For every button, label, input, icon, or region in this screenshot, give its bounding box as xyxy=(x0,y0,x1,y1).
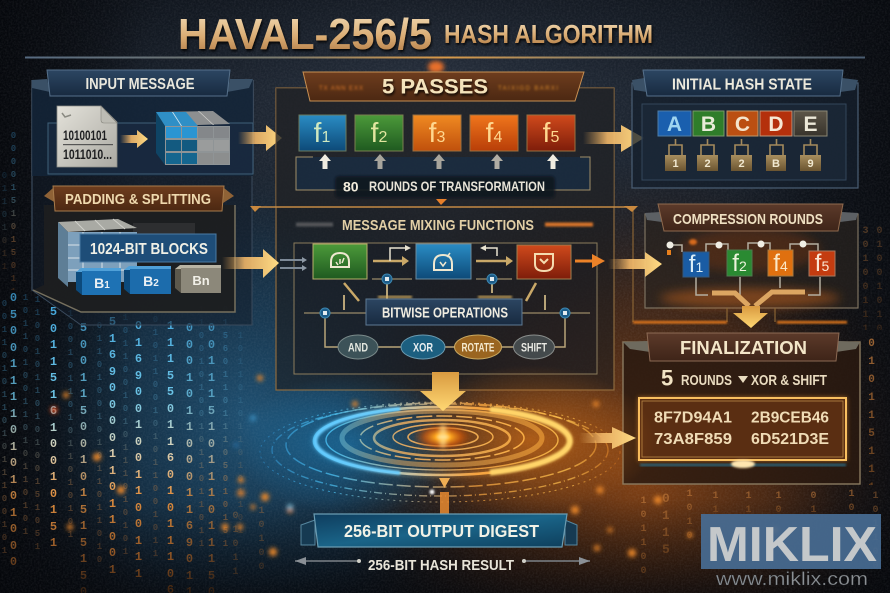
binary rain: left columns: 10100 xyxy=(258,506,264,573)
function f1: f xyxy=(314,117,321,148)
logo: MIKLIX xyxy=(701,514,881,589)
label: 80 rounds of transformation: 80 xyxy=(343,178,359,194)
hash value box: 2B9CEB46 xyxy=(751,410,829,426)
hash value box: 73A8F859 xyxy=(654,431,732,448)
panel: input message xyxy=(32,70,253,325)
heading: initial hash state: INITIAL HASH STATE xyxy=(672,76,812,94)
text: 5 rounds xor and shift xyxy=(661,366,827,390)
label: 80 rounds of transformation: ROUNDS OF TRANSFORMATION xyxy=(369,178,545,194)
pill: SHIFT: SHIFT xyxy=(521,340,547,354)
banner: 256-bit output digest xyxy=(301,514,577,547)
binary rain: left columns: 501151610010151 xyxy=(50,305,57,550)
binary rain: left columns: 11155011601011106 xyxy=(167,319,174,593)
register B: B xyxy=(701,113,716,136)
connector nodes xyxy=(320,274,570,318)
text: 5 rounds xor and shift: 5 xyxy=(661,366,673,390)
icon: data block stack xyxy=(58,219,195,287)
bracket: transformation frame xyxy=(296,157,590,190)
glowing rails xyxy=(633,308,847,324)
binary rain: left columns: 11001011010100151051 xyxy=(35,295,40,552)
pass functions f1 to f5 xyxy=(299,115,575,151)
binary rain: left columns: 10 xyxy=(848,489,854,514)
binary rain: left columns: 1011010110101101 xyxy=(238,331,243,536)
lock 5: 9 xyxy=(807,158,814,170)
binary rain: left columns: 00110101101011100101 xyxy=(2,299,7,556)
panel: initial hash state xyxy=(632,70,858,188)
label: 256-bit hash result xyxy=(295,557,590,574)
panel: finalization xyxy=(623,333,860,484)
binary rain: left columns: 0169001001100111 xyxy=(135,319,142,580)
icon: binary document: 10100101 xyxy=(63,127,107,143)
lock 3: 2 xyxy=(738,158,745,170)
text: 5 rounds xor and shift: ROUNDS xyxy=(681,373,732,389)
compression f1: f1 xyxy=(689,251,703,278)
function f2: f2 xyxy=(371,117,387,148)
register A: A xyxy=(667,113,682,136)
panel: compression rounds xyxy=(624,204,858,322)
pill: ROTATE xyxy=(454,335,502,359)
logo: MIKLIX: MIKLIX xyxy=(707,518,877,572)
function f5 xyxy=(527,115,575,151)
binary rain: left columns: 50011500101515150 xyxy=(80,321,87,593)
register D: D xyxy=(768,113,784,136)
banner: 256-bit output digest: 256-BIT OUTPUT DIGEST xyxy=(344,521,539,541)
heading: padding and splitting xyxy=(53,186,224,211)
panel: mixing inner frame xyxy=(294,243,597,374)
function f2 xyxy=(355,115,403,151)
function f3 xyxy=(413,115,461,151)
heading: input message: INPUT MESSAGE xyxy=(86,76,194,93)
function f1 xyxy=(299,115,346,151)
register B xyxy=(693,111,724,136)
binary rain: left columns: 1010 xyxy=(686,489,692,542)
small down arrow xyxy=(436,199,447,205)
pill: SHIFT xyxy=(514,335,554,359)
compression functions xyxy=(683,250,835,278)
heading: 5 passes: TX ANN EXX xyxy=(319,86,363,92)
arrows: into mixing xyxy=(280,260,304,268)
arrow: compression to finalization xyxy=(733,306,768,328)
binary rain: left columns: 0156011011105010151 xyxy=(223,305,228,549)
arrow: mixing to compression xyxy=(575,254,605,268)
hash value box xyxy=(638,397,847,468)
hash locks xyxy=(665,155,821,171)
function f1: 1 xyxy=(321,129,330,146)
arrow: mixing to vortex xyxy=(420,372,466,411)
lock 1: 1 xyxy=(672,158,679,170)
bitwise operations box: BITWISE OPERATIONS xyxy=(382,306,508,322)
mixing block red xyxy=(517,245,571,279)
panel: padding and splitting xyxy=(33,186,235,312)
binary rain: left columns: 01101011 xyxy=(2,171,7,272)
binary rain: left columns: 01011 xyxy=(232,511,238,578)
compression f4 xyxy=(768,250,793,277)
function f4: f4 xyxy=(486,117,502,148)
round connectors xyxy=(672,243,820,295)
binary rain: left columns: 1100101001011011011 xyxy=(199,305,204,549)
label: 1024-bit blocks: 1024-BIT BLOCKS xyxy=(90,241,208,258)
title xyxy=(178,10,653,59)
lock 4 xyxy=(766,155,786,171)
binary rain: left columns: 0110100101011011010 xyxy=(97,321,102,565)
state registers A to E xyxy=(658,111,827,136)
binary rain: left columns: 1011010011010110101 xyxy=(23,293,28,537)
glowing particles xyxy=(50,375,778,557)
register D xyxy=(760,111,792,136)
lock 5 xyxy=(800,155,821,171)
vortex xyxy=(235,365,655,515)
arrow: vortex to finalization xyxy=(579,427,636,449)
pill: ROTATE: ROTATE xyxy=(462,340,494,354)
connector: vortex to digest xyxy=(439,478,450,514)
connectors xyxy=(304,248,590,347)
lock 2 xyxy=(697,155,718,171)
heading: input message xyxy=(47,70,230,96)
register A xyxy=(658,111,691,136)
heading: message mixing functions: MESSAGE MIXING FUNCTIONS xyxy=(342,217,534,234)
register C: C xyxy=(735,113,750,136)
hash value box: 6D521D3E xyxy=(751,431,829,448)
binary rain: left columns: 0101100101011001011 xyxy=(153,315,158,559)
logo: MIKLIX: www.miklix.com xyxy=(715,569,868,589)
pill: XOR: XOR xyxy=(413,340,433,354)
pill: XOR xyxy=(401,335,445,359)
icon: block matrix cube xyxy=(156,111,230,165)
mixing block blue xyxy=(416,244,471,279)
arrow: input to passes xyxy=(238,125,282,151)
title: HAVAL-256/5 xyxy=(178,10,432,59)
heading: 5 passes: 5 PASSES xyxy=(382,76,488,98)
up arrows xyxy=(319,154,559,169)
lock 3 xyxy=(731,155,752,171)
heading: 5 passes: TAIXIGD BARXI xyxy=(498,86,558,92)
compression f5: f5 xyxy=(815,250,829,277)
block B2 xyxy=(124,266,171,294)
arrow: padding to mixing xyxy=(222,249,279,278)
label: 80 rounds of transformation xyxy=(335,176,555,198)
text: 5 rounds xor and shift: XOR & SHIFT xyxy=(751,373,827,389)
lock 2: 2 xyxy=(704,158,711,170)
function f4 xyxy=(470,115,518,151)
binary rain: left columns: 1011001010111010101 xyxy=(123,313,128,557)
arrow: passes to initial state xyxy=(583,125,644,152)
heading: 5 passes xyxy=(303,72,584,101)
block B1 xyxy=(76,268,121,295)
function f5: f5 xyxy=(543,117,559,148)
heading: finalization xyxy=(647,333,839,361)
bitwise pills xyxy=(338,335,554,359)
hash value box: 8F7D94A1 xyxy=(654,410,732,426)
label: 1024-bit blocks xyxy=(80,234,216,262)
icon: binary document xyxy=(57,106,117,167)
binary rain: left columns: 5169000011011001 xyxy=(109,315,116,576)
pill: AND xyxy=(338,335,378,359)
register E xyxy=(794,111,827,136)
arrow: mixing into compression xyxy=(608,252,662,277)
binary rain: left columns: 100101101011010101 xyxy=(68,309,73,540)
heading: compression rounds xyxy=(658,204,843,231)
binary rain: left columns: 05001111010101000 xyxy=(10,291,17,569)
mixing block green xyxy=(313,244,367,279)
block Bn: Bn xyxy=(192,273,210,288)
compression f1 xyxy=(683,251,709,278)
bitwise operations box xyxy=(366,296,522,325)
block B2: B2 xyxy=(143,273,159,289)
function f3: f3 xyxy=(429,117,445,148)
heading: compression rounds: COMPRESSION ROUNDS xyxy=(673,211,823,228)
register C xyxy=(727,111,758,136)
icon: binary document: 1011010... xyxy=(63,146,112,162)
compression f2: f2 xyxy=(732,250,747,277)
panel: passes outer frame xyxy=(250,61,632,390)
lock 4: B xyxy=(772,158,780,170)
pill: AND: AND xyxy=(348,340,368,354)
binary rain: left columns: 101100 xyxy=(872,491,878,572)
merge arrows xyxy=(712,292,805,306)
heading: initial hash state xyxy=(643,70,843,96)
compression f5 xyxy=(809,250,835,277)
lock 1 xyxy=(665,155,686,171)
label: 256-bit hash result: 256-BIT HASH RESULT xyxy=(368,557,514,574)
lock connectors xyxy=(669,139,817,155)
heading: finalization: FINALIZATION xyxy=(680,338,807,358)
register E: E xyxy=(803,113,818,136)
title: HASH ALGORITHM xyxy=(444,19,653,49)
arrow: document to matrix xyxy=(120,130,148,148)
compression f4: f4 xyxy=(773,250,788,277)
block B1: B1 xyxy=(94,275,110,291)
heading: padding and splitting: PADDING & SPLITTING xyxy=(65,191,211,208)
compression f2 xyxy=(727,250,752,277)
block Bn xyxy=(175,265,221,293)
